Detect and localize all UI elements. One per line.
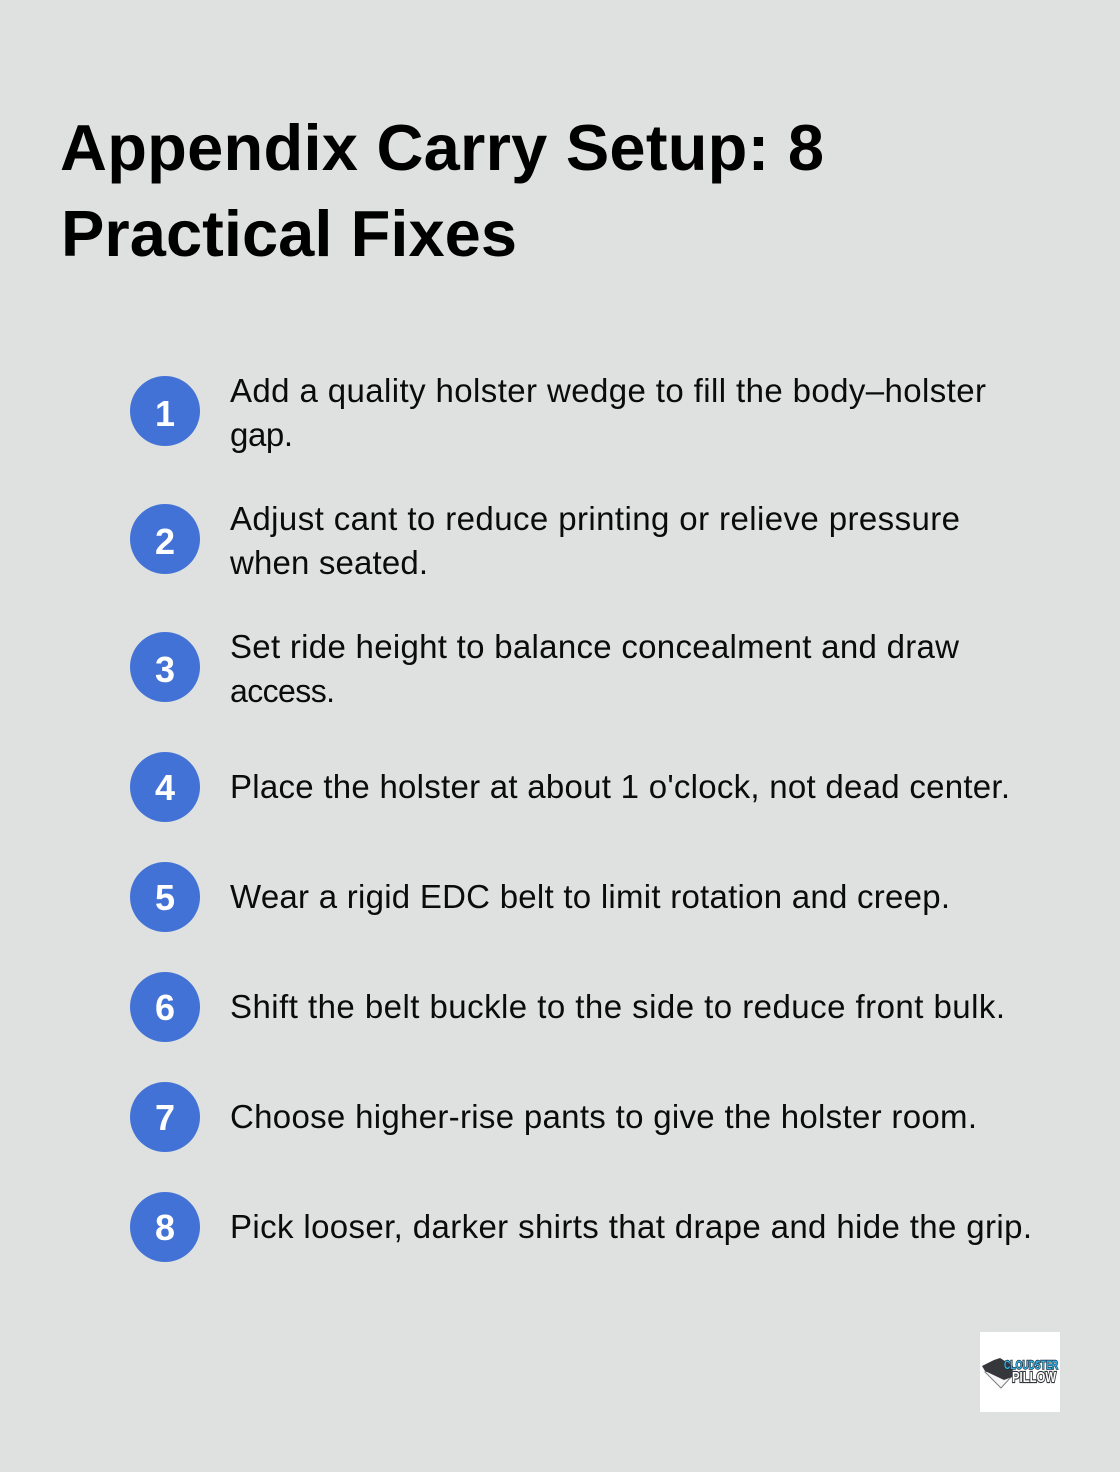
list item 5 xyxy=(130,862,950,932)
number badge 4 xyxy=(130,752,200,822)
item 3 text xyxy=(230,628,959,709)
list item 6 xyxy=(130,972,1005,1042)
list item 2 xyxy=(130,500,960,581)
number badge 5: 5 xyxy=(155,877,175,918)
item 2 text: Adjust cant to reduce printing or relieve pressure xyxy=(230,500,960,537)
item 8 text: Pick looser, darker shirts that drape and hide the grip. xyxy=(230,1208,1032,1245)
list item 7 xyxy=(130,1082,977,1152)
number badge 3 xyxy=(130,632,200,702)
number badge 1: 1 xyxy=(155,393,175,434)
number badge 8 xyxy=(130,1192,200,1262)
title xyxy=(60,111,824,270)
title: Practical Fixes xyxy=(61,197,517,270)
item 1 text: Add a quality holster wedge to fill the body–holster xyxy=(230,372,986,409)
list item 1 xyxy=(130,372,986,453)
list item 8 xyxy=(130,1192,1032,1262)
number badge 3: 3 xyxy=(155,649,175,690)
list item 4 xyxy=(130,752,1010,822)
item 3 text: access. xyxy=(230,673,335,709)
item 7 text: Choose higher-rise pants to give the holster room. xyxy=(230,1098,977,1135)
number badge 6 xyxy=(130,972,200,1042)
logo: Cloudster Pillow: PILLOW xyxy=(1012,1369,1057,1386)
item 1 text: gap. xyxy=(230,416,293,453)
number badge 7: 7 xyxy=(155,1097,175,1138)
number badge 7 xyxy=(130,1082,200,1152)
number badge 2: 2 xyxy=(155,521,175,562)
item 1 text xyxy=(230,372,986,453)
number badge 1 xyxy=(130,376,200,446)
item 2 text: when seated. xyxy=(229,544,428,581)
logo: Cloudster Pillow: CLOUDSTER xyxy=(1004,1358,1058,1372)
item 2 text xyxy=(229,500,960,581)
logo: Cloudster Pillow xyxy=(980,1332,1060,1412)
number badge 5 xyxy=(130,862,200,932)
item 3 text: Set ride height to balance concealment and draw xyxy=(230,628,959,665)
item 6 text: Shift the belt buckle to the side to reduce front bulk. xyxy=(230,988,1005,1025)
item 4 text: Place the holster at about 1 o'clock, not dead center. xyxy=(230,768,1010,805)
item 5 text: Wear a rigid EDC belt to limit rotation and creep. xyxy=(230,878,950,915)
number badge 4: 4 xyxy=(155,767,175,808)
number badge 6: 6 xyxy=(155,987,175,1028)
list item 3 xyxy=(130,628,959,709)
number badge 2 xyxy=(130,504,200,574)
number badge 8: 8 xyxy=(155,1207,175,1248)
title: Appendix Carry Setup: 8 xyxy=(60,111,824,184)
